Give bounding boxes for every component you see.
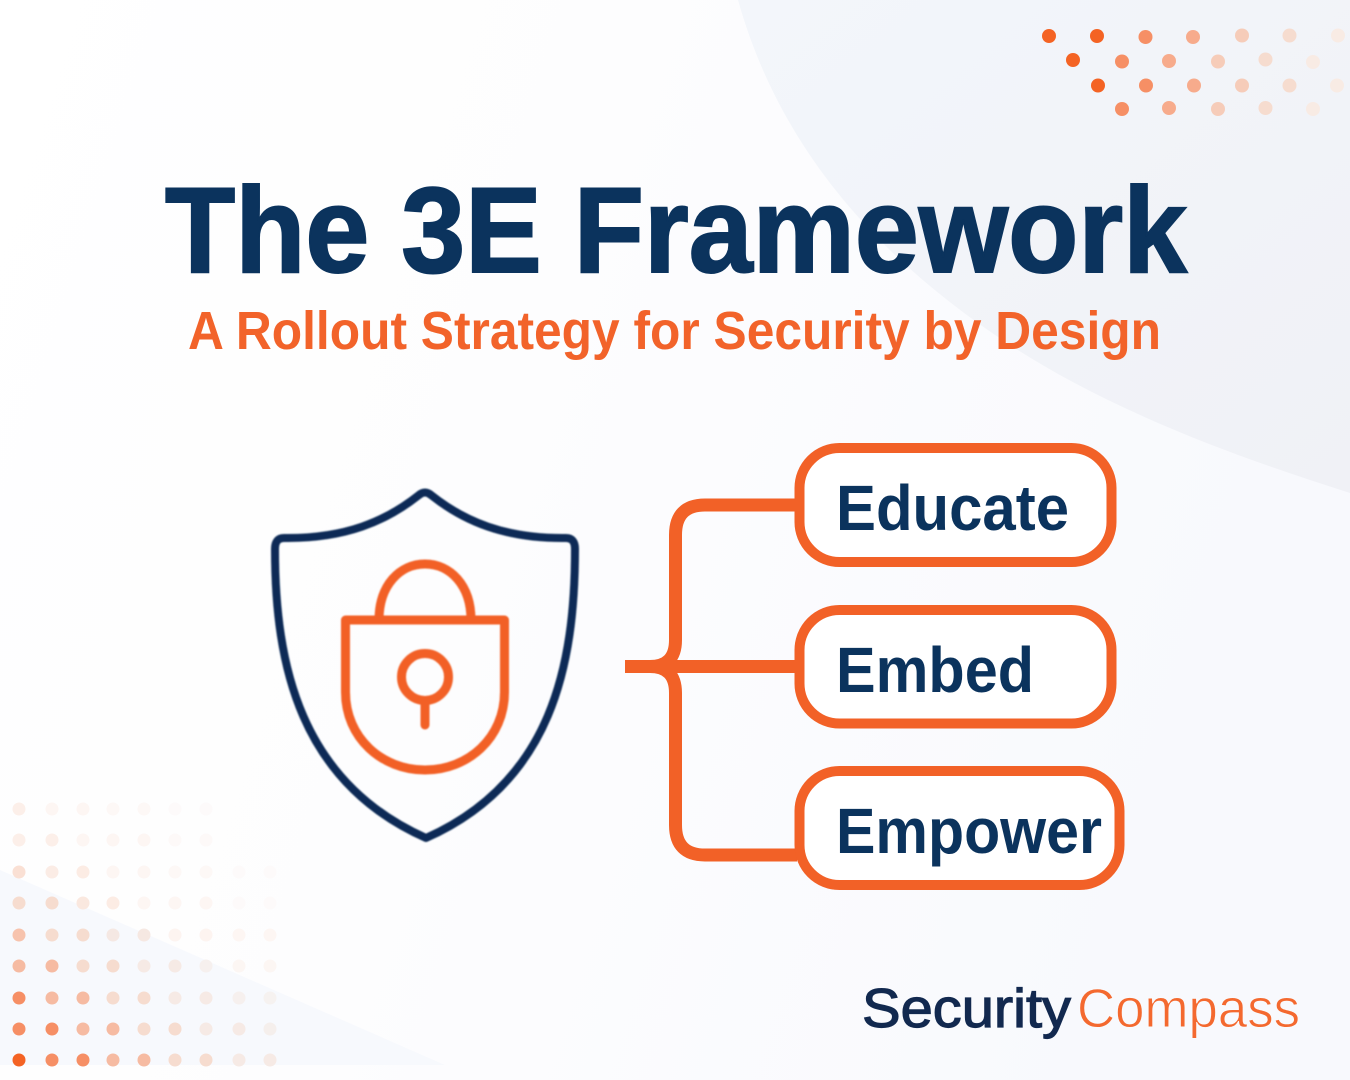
dot pattern: top right [1042,28,1345,116]
logo: Security Compass: Security [862,977,1072,1039]
box: Empower: Empower [836,795,1102,867]
subtitle: A Rollout Strategy for Security by Design [188,301,1161,361]
logo: Security Compass [862,977,1300,1039]
padlock keyhole [402,654,448,725]
icon: shield with padlock [275,492,575,838]
box: Empower [800,771,1120,885]
shield outline [275,492,575,838]
padlock body [346,620,504,770]
box: Embed: Embed [836,634,1034,706]
box: Educate: Educate [836,472,1069,544]
connector bracket [625,505,797,855]
box: Embed [800,610,1112,724]
logo: Security Compass: Compass [1077,977,1300,1039]
background shape: bottom left triangle [0,870,445,1065]
box: Educate [800,448,1112,562]
dot pattern: bottom left [12,802,276,1066]
padlock shackle [379,564,471,620]
background shape: top right curve [738,0,1350,493]
title: The 3E Framework [165,162,1187,298]
